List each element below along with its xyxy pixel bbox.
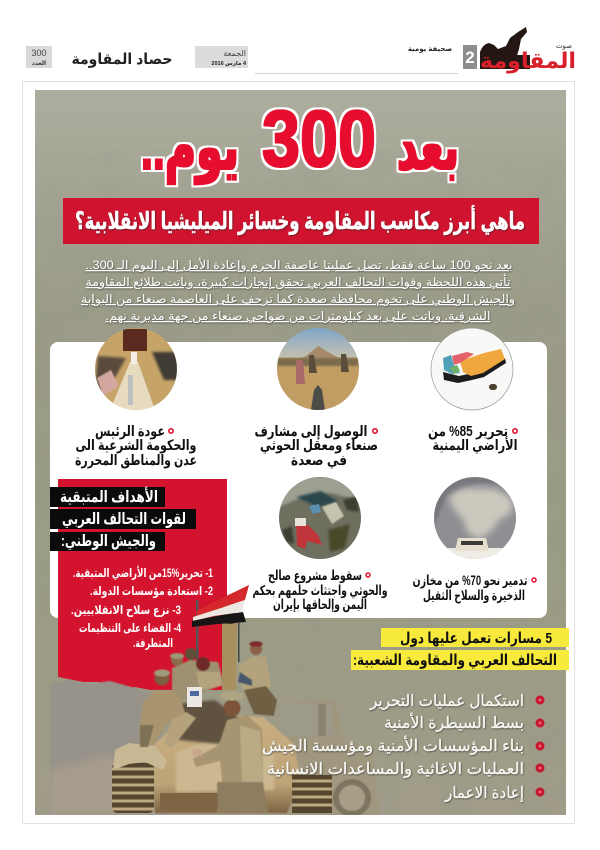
newspaper logo: المقاومة (480, 48, 576, 74)
yellow heading: five tracks: التحالف العربي والمقاومة الشعبية: (353, 652, 557, 669)
red subtitle banner (63, 198, 539, 244)
main title: 300 (262, 94, 376, 183)
track 5: إعادة الاعمار (444, 785, 524, 803)
photo: government meeting (95, 328, 178, 410)
newspaper logo (480, 27, 576, 74)
five tracks list (262, 693, 543, 803)
page header (26, 27, 576, 74)
soldier seated left (139, 670, 196, 748)
caption: president return (75, 424, 197, 469)
caption: Saleh and Houthi project: والحوثي واجتثاث حلمهم بحكم (252, 583, 388, 598)
gun barrel (222, 618, 237, 690)
caption: ammunition destroyed: تدمير نحو 70% من مخازن (412, 573, 528, 588)
white placard (187, 687, 202, 707)
main title: بعد (397, 111, 459, 183)
date box: 4 مارس 2016 (211, 61, 247, 67)
caption: reaching Sanaa (254, 424, 378, 469)
caption: reaching Sanaa: في صعدة (291, 453, 347, 469)
soldiers seated behind turret (170, 648, 224, 702)
yellow heading: five tracks: 5 مسارات تعمل عليها دول (400, 630, 552, 647)
track 2: بسط السيطرة الأمنية (384, 712, 524, 733)
date box: الجمعة (223, 49, 246, 58)
intro paragraph: تأتي هذه اللحظة وقوات التحالف العربي تحقق إنجازات كبيرة، وباتت طلائع المقاومة (86, 273, 510, 290)
photo: desert position (277, 328, 359, 410)
soldier seated right (238, 641, 277, 716)
goals heading: والجيش الوطني: (61, 533, 156, 551)
intro paragraph (81, 257, 515, 324)
white achievements panel (50, 342, 547, 618)
caption: reaching Sanaa: الوصول إلى مشارف (254, 424, 368, 440)
caption: Saleh and Houthi project: اليمن وإلحاقها بإيران (273, 597, 367, 612)
issue number box: العدد (32, 60, 46, 67)
caption: Saleh and Houthi project: سقوط مشروع صالح (268, 568, 362, 583)
caption: reaching Sanaa: صنعاء ومعقل الحوثي (260, 438, 378, 454)
main title (141, 94, 459, 185)
caption: president return: عودة الرئيس (95, 424, 165, 440)
intro paragraph: بعد نحو 100 ساعة فقط، تصل عمليتا عاصفة الحزم وإعادة الأمل إلى اليوم الـ 300.. (85, 257, 512, 273)
intro paragraph: الشرقية. وباتت على بعد كيلومترات من ضواحي صنعاء من جهة مديرية نهم. (106, 309, 490, 324)
caption: ammunition destroyed: الذخيرة والسلاح الثقيل (423, 588, 525, 603)
daily newspaper label: صحيفة يومية (408, 46, 452, 53)
issue number box: 300 (31, 48, 47, 58)
goals list: 1- تحرير%15من الأراضي المتبقية. (73, 565, 213, 580)
yemeni flag (192, 585, 249, 627)
caption: Saleh and Houthi project (252, 568, 388, 612)
goals list: المتطرفة. (133, 636, 173, 650)
tank right track (292, 775, 332, 813)
photo: soldiers on tank (50, 585, 380, 825)
intro paragraph: والجيش الوطني على تخوم محافظة صعدة كما تزحف على العاصمة صنعاء من البوابة (81, 292, 515, 307)
photo: yemen map (431, 328, 513, 410)
caption: 85 percent liberated: الأراضي اليمنية (432, 436, 518, 454)
tank hull (153, 715, 301, 813)
goals heading (50, 487, 196, 551)
yellow heading: five tracks (351, 628, 569, 670)
caption: ammunition destroyed (412, 573, 536, 603)
red goals panel (50, 479, 227, 690)
caption: 85 percent liberated (428, 424, 518, 454)
section heading: حصاد المقاومة (72, 51, 172, 68)
issue number box (26, 46, 52, 68)
standing soldier (193, 692, 268, 813)
poster background (35, 90, 566, 815)
main title: يوم.. (141, 111, 239, 185)
caption: 85 percent liberated: تحرير 85% من (428, 424, 508, 440)
mountain backdrop (50, 680, 170, 825)
photo frame: map (431, 328, 513, 410)
goals heading: لقوات التحالف العربي (62, 511, 186, 529)
page number box: 2 (465, 48, 475, 67)
flag pole (196, 600, 198, 660)
photo: ammunition explosion (434, 477, 516, 560)
goals list: 2- استعادة مؤسسات الدولة. (90, 584, 213, 599)
page number box (463, 45, 477, 69)
second vehicle (277, 699, 380, 823)
date box (195, 46, 248, 68)
photo: destroyed site (279, 477, 361, 559)
goals list: 4- القضاء على التنظيمات (79, 621, 181, 635)
track 4: العمليات الاغاثية والمساعدات الانسانية (267, 761, 524, 779)
goals list: 3- نزع سلاح الانقلابيين. (71, 603, 181, 617)
caption: president return: والحكومة الشرعية الى (76, 438, 196, 454)
captions (75, 424, 536, 612)
goals list (71, 565, 213, 650)
goals heading: الأهداف المتبقية (60, 487, 158, 506)
caption: president return: عدن والمناطق المحررة (75, 453, 197, 469)
newspaper logo: صوت (556, 43, 572, 50)
turret shadows (178, 698, 239, 746)
track 1: استكمال عمليات التحرير (369, 693, 524, 711)
tank left track (112, 743, 167, 813)
track 3: بناء المؤسسات الأمنية ومؤسسة الجيش (262, 735, 524, 756)
